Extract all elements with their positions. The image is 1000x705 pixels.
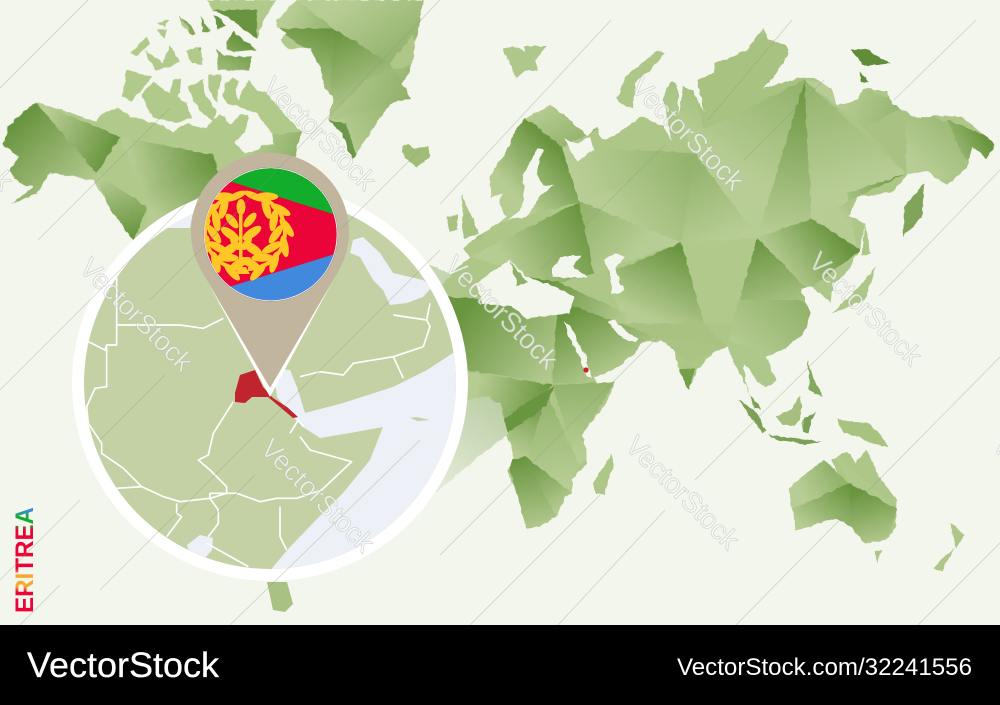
VectorStock watermarks: VectorStock (620, 430, 746, 555)
VectorStock watermarks: VectorStock (803, 246, 929, 371)
emblem: olive branch (217, 199, 265, 274)
pale ocean wedge toward the inset (419, 397, 508, 507)
pin tip outline (197, 262, 343, 397)
footer brand: VectorStock (27, 646, 220, 685)
inset circle map (70, 185, 470, 590)
footer bar (0, 625, 1000, 705)
pale wedge near Europe (419, 260, 451, 313)
North America and Greenland (0, 0, 440, 247)
inset land and seas (84, 214, 456, 569)
inland seas (476, 137, 779, 378)
emblem: wreath (204, 190, 294, 280)
VectorStock watermarks: VectorStock (625, 71, 751, 196)
map pin with flag (191, 150, 350, 397)
small island below the inset (267, 582, 293, 612)
VectorStock watermarks: VectorStock (257, 71, 383, 196)
VectorStock watermarks: VectorStock (255, 433, 381, 558)
country borders (87, 273, 430, 567)
VectorStock watermarks: VectorStock (439, 250, 565, 375)
title: ERITREA vertical: ERITREA (11, 507, 39, 613)
Italy (509, 260, 527, 285)
VectorStock watermarks (0, 71, 1000, 558)
Eritrea dot on world map (583, 367, 589, 373)
inset ring (72, 185, 468, 581)
footer image id: VectorStock.com/32241556 (677, 654, 972, 681)
VectorStock watermarks: VectorStock (74, 252, 200, 377)
Eritrea highlighted (235, 370, 298, 418)
Eurasia, Africa and Oceania (404, 20, 1000, 587)
pin body (191, 153, 349, 388)
flag of Eritrea (204, 167, 338, 302)
